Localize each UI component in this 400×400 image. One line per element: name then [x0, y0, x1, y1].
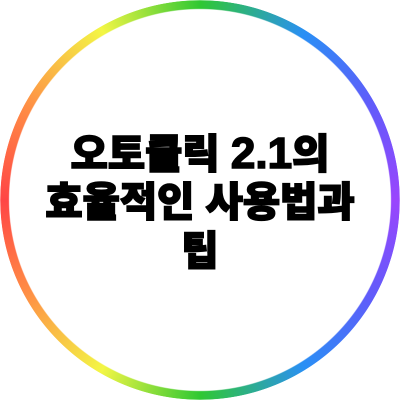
title: 오토클릭 2.1의 — [71, 129, 329, 178]
title: 효율적인 사용법과 — [45, 179, 355, 225]
title — [45, 129, 355, 274]
title: 팁 — [181, 228, 219, 274]
